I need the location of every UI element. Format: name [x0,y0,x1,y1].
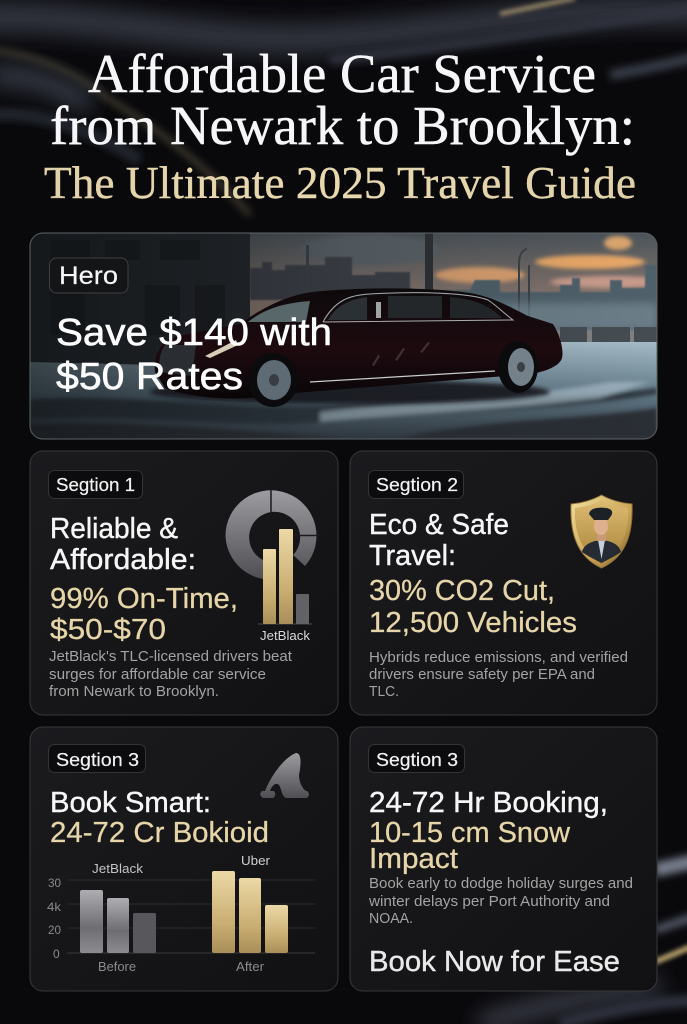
badge: section 3 booking [368,744,464,772]
bar chart: before and after: Uber [241,853,271,868]
heading: 24-72 Cr Bokioid [50,817,269,849]
body text: NOAA. [369,910,413,927]
body text: winter delays per Port Authority and [368,893,610,910]
heading [369,787,608,875]
body text: Book early to dodge holiday surges and [369,875,633,892]
icon: chauffeur shield [571,495,632,568]
panel: section 3 booking [350,727,657,991]
badge: section 2: Segtion 2 [376,475,458,495]
panel: section 3 chart [30,727,338,991]
heading: 24-72 Hr Booking, [369,787,608,819]
badge: section 3: Segtion 3 [56,750,139,770]
hero headline: $50 Rates [56,356,243,398]
heading: Affordable: [50,544,196,576]
body text [369,649,628,700]
heading: 10-15 cm Snow [369,817,571,849]
body text: drivers ensure safety per EPA and [369,666,595,683]
panel: section 2 [350,451,657,715]
bar chart: before and after: 20 [48,923,61,937]
heading: Reliable & [50,513,178,545]
body text: from Newark to Brooklyn. [49,683,219,700]
bar chart: before and after: 0 [53,947,60,961]
key stats: $50-$70 [50,614,166,646]
key stats [369,575,577,639]
panel: hero [30,233,670,439]
key stats [50,583,238,646]
heading: Eco & Safe [369,509,509,541]
bar chart: before and after [47,853,315,974]
title: Affordable Car Service [88,43,596,104]
badge: hero [50,258,128,293]
hero headline: Save $140 with [56,312,332,354]
title: from Newark to Brooklyn: [50,95,635,156]
title [44,43,636,208]
heading [369,509,509,572]
badge: section 2 [368,470,464,498]
body text [368,875,633,927]
badge: section 1: Segtion 1 [56,475,135,495]
body text: Hybrids reduce emissions, and verified [369,649,628,666]
heading: Book Smart: [50,787,211,819]
heading: Impact [369,843,458,875]
chart: donut and bars [225,490,318,643]
badge: section 3 [48,744,146,772]
bar chart: before and after: JetBlack [92,861,144,876]
badge: hero: Hero [59,262,118,290]
bar chart: before and after: 4k [47,900,62,914]
icon: road arrow [260,753,309,798]
body text: surges for affordable car service [49,666,266,683]
key stats: 30% CO2 Cut, [369,575,555,607]
bar chart: before and after: Before [98,959,136,974]
panel: section 1 [30,451,338,715]
hero headline [56,312,332,398]
bar chart: before and after: After [236,959,265,974]
body text [49,648,293,700]
heading [50,513,196,576]
body text: TLC. [369,683,399,700]
body text: JetBlack's TLC-licensed drivers beat [49,648,293,665]
badge: section 3 booking: Segtion 3 [376,750,458,770]
title: The Ultimate 2025 Travel Guide [44,157,636,208]
call to action: Book Now for Ease [369,946,620,978]
hero photo: limousine in snow [30,233,670,439]
chart: donut and bars: JetBlack [260,628,310,643]
bar chart: before and after: 30 [48,876,61,890]
key stats: 99% On-Time, [50,583,238,615]
heading: Travel: [369,540,456,572]
heading [50,787,269,849]
badge: section 1 [48,470,142,498]
limousine [150,288,563,407]
key stats: 12,500 Vehicles [369,607,577,639]
